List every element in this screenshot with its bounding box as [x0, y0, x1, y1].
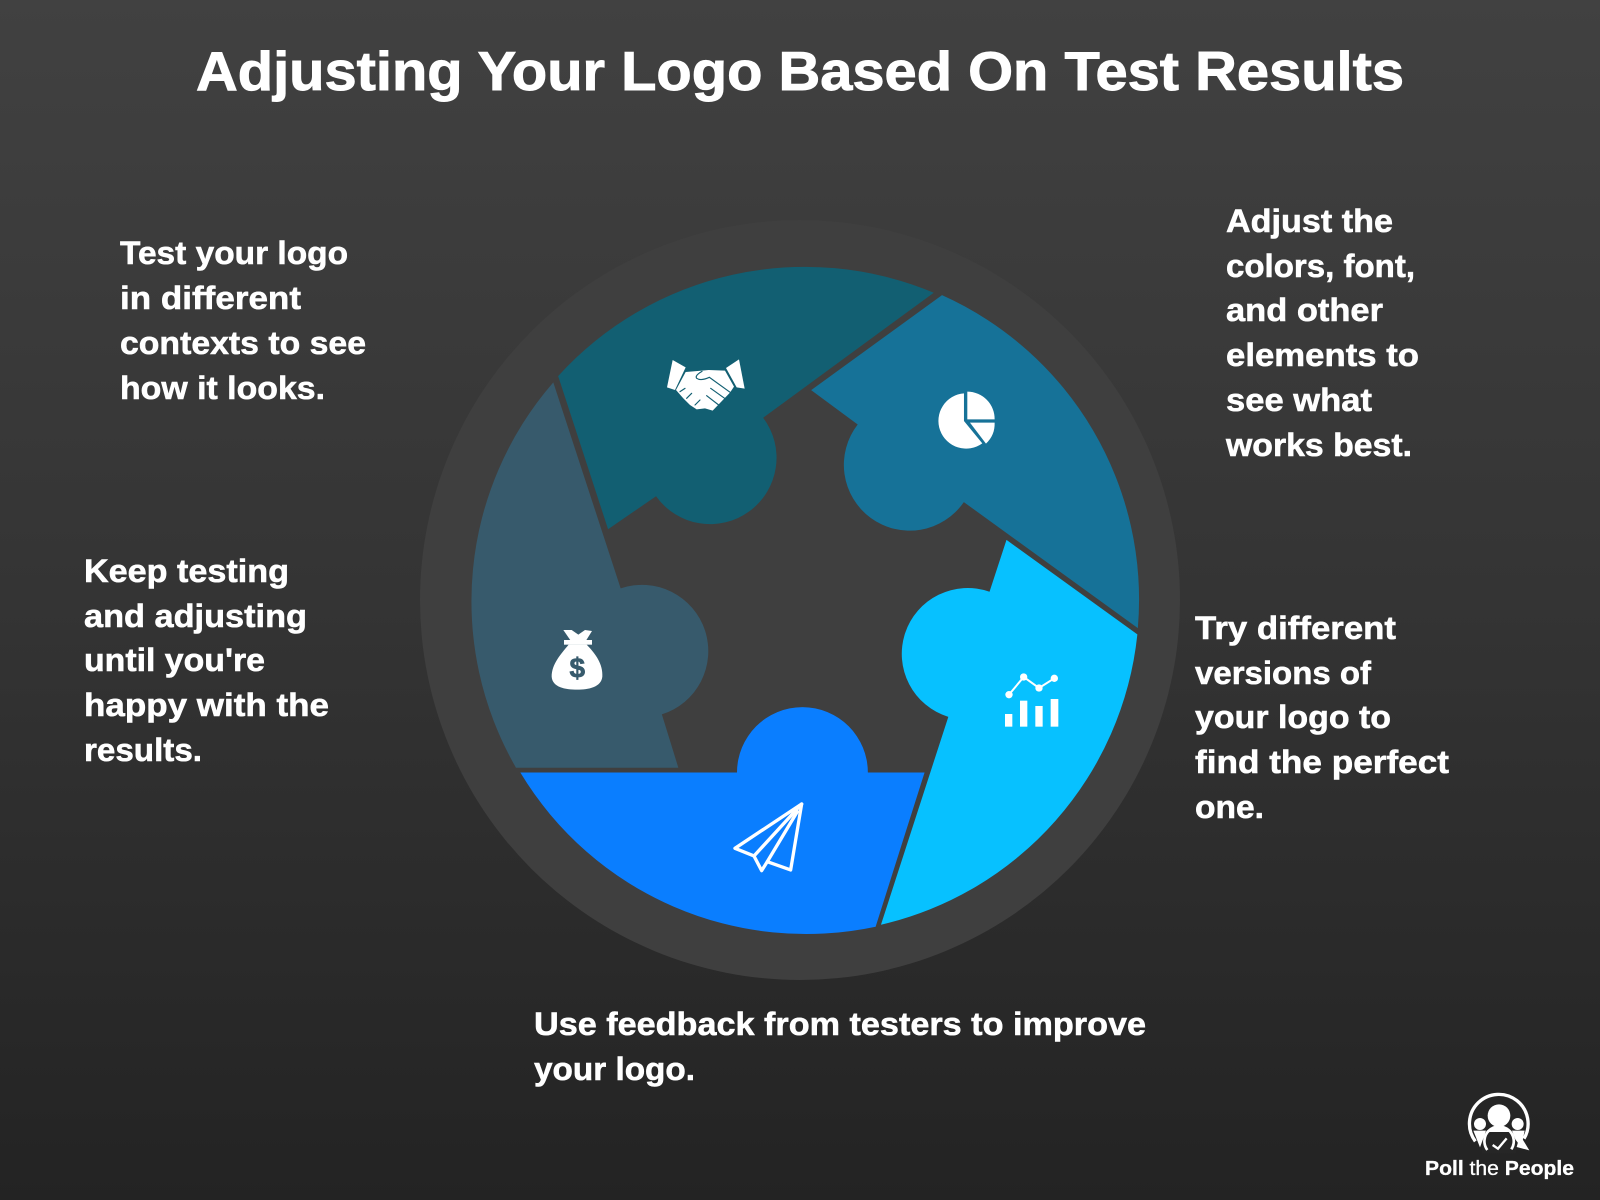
text: try different versions: Try different [1195, 610, 1396, 646]
text: adjust the colors: Adjust the [1226, 203, 1393, 239]
icon: chart with trend line [1005, 673, 1058, 727]
text: keep testing [84, 553, 329, 768]
outer ring [420, 220, 1180, 980]
text: adjust the colors: colors, font, [1226, 248, 1415, 284]
text: adjust the colors [1225, 203, 1419, 463]
icon: paper plane [735, 804, 802, 871]
text: use feedback: your logo. [534, 1051, 695, 1087]
text: use feedback: Use feedback from testers to improve [534, 1006, 1146, 1042]
text: keep testing: until you're [84, 642, 265, 678]
text: test your logo: Test your logo [120, 235, 348, 271]
text: try different versions: your logo to [1195, 699, 1391, 735]
text: test your logo [120, 235, 366, 406]
text: use feedback [534, 1006, 1146, 1087]
text: adjust the colors: elements to [1226, 337, 1419, 373]
icon: money bag: $ [570, 652, 586, 683]
icon: handshake [667, 359, 745, 411]
segment: upper right blue [811, 295, 1139, 628]
logo mark [1469, 1094, 1529, 1153]
icon: money bag [552, 630, 602, 690]
text: try different versions [1195, 610, 1449, 825]
text: test your logo: contexts to see [120, 325, 366, 361]
title: Adjusting Your Logo Based On Test Results [196, 40, 1404, 102]
text: keep testing: happy with the [84, 687, 329, 723]
text: adjust the colors: works best. [1225, 427, 1412, 463]
text: keep testing: results. [84, 732, 202, 768]
logo: Poll the People [1425, 1094, 1574, 1180]
text: keep testing: and adjusting [84, 598, 307, 634]
circular diagram [420, 220, 1180, 980]
segment: top teal [558, 267, 934, 529]
logo wordmark: Poll the People [1425, 1158, 1574, 1180]
text: adjust the colors: see what [1226, 382, 1372, 418]
five puzzle segments [471, 267, 1139, 934]
text: try different versions: find the perfect [1195, 744, 1449, 780]
text: adjust the colors: and other [1226, 292, 1383, 328]
segment: bottom blue [520, 707, 925, 934]
icon: pie chart [938, 392, 995, 449]
segment: lower right cyan [881, 540, 1137, 925]
text: test your logo: in different [120, 280, 301, 316]
text: test your logo: how it looks. [120, 370, 325, 406]
text: try different versions: versions of [1195, 655, 1371, 691]
text: try different versions: one. [1195, 789, 1264, 825]
segment: left slate [471, 382, 708, 768]
text: keep testing: Keep testing [84, 553, 289, 589]
